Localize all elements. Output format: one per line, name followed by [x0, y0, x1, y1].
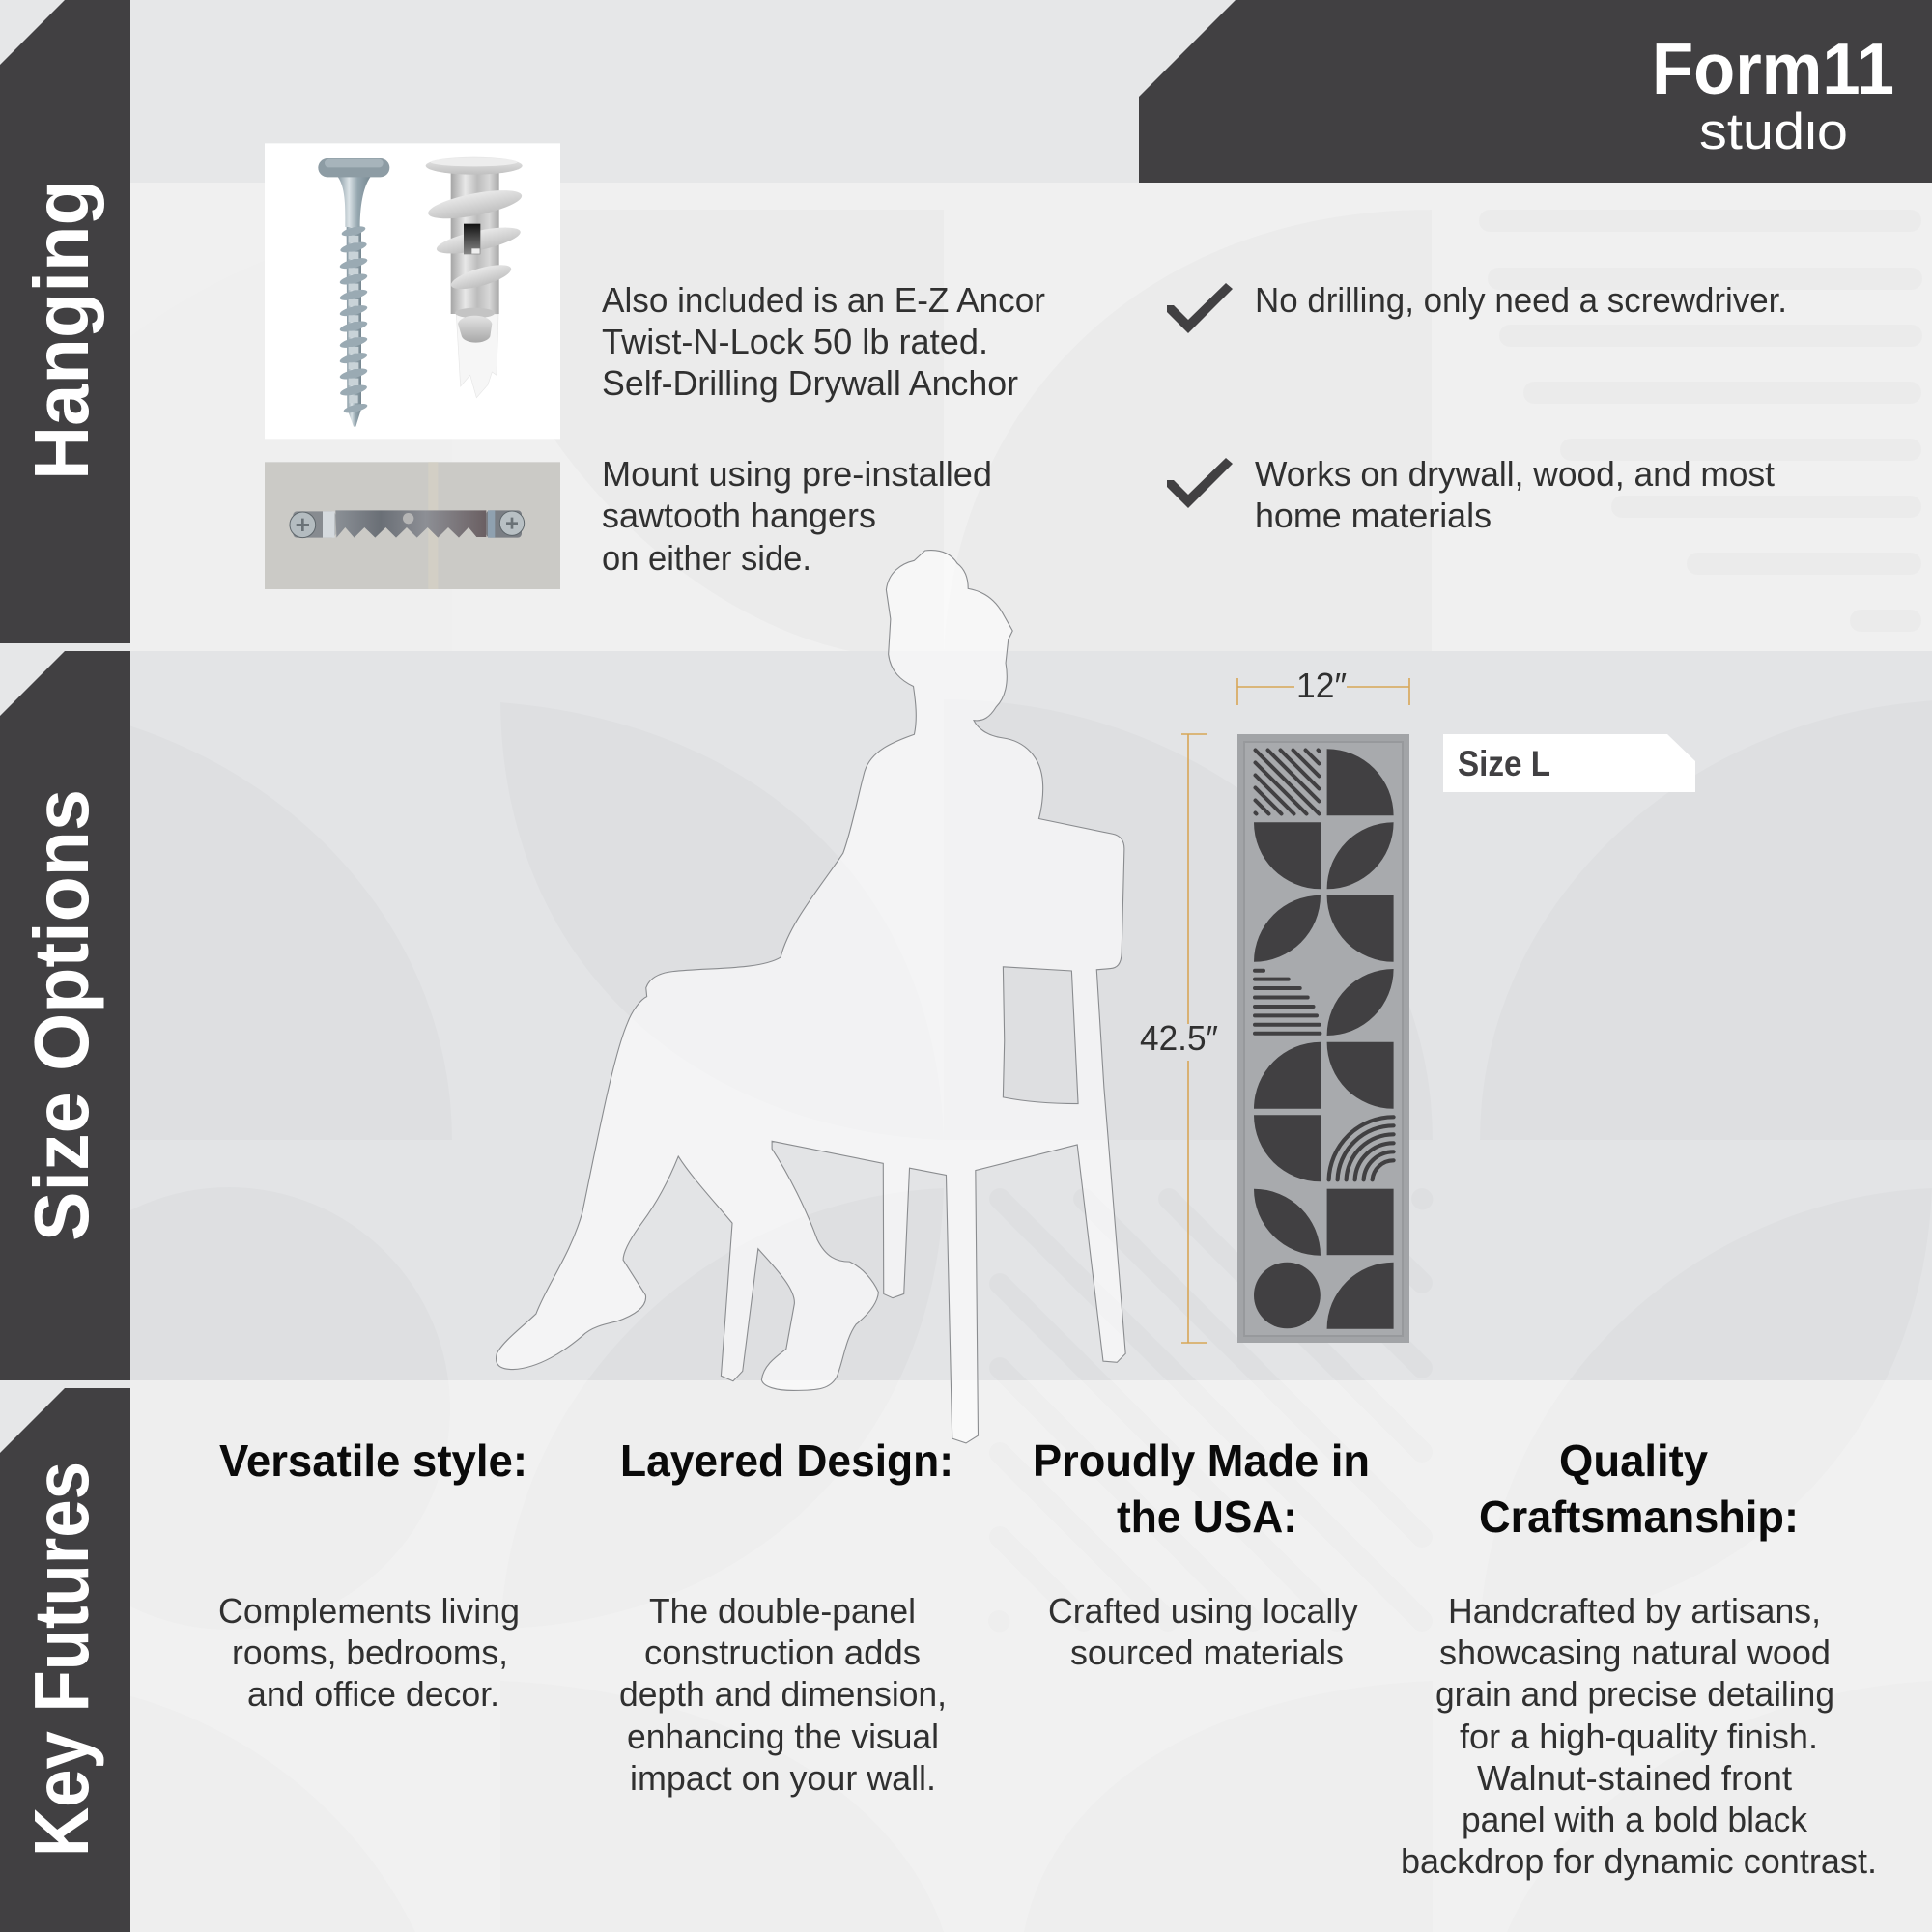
icon: check mark 2	[1167, 458, 1233, 508]
column: Quality Craftsmanship: Craftsmanship:	[1479, 1492, 1799, 1542]
artwork panel	[1237, 734, 1409, 1343]
column: Layered Design	[619, 1435, 953, 1798]
sidebar: Key Futures	[0, 1388, 130, 1932]
dimension: width 12 in	[1237, 666, 1409, 705]
dimension: height 42.5 in	[1140, 734, 1218, 1343]
column: Quality Craftsmanship: for a high-quality finish.	[1460, 1717, 1818, 1756]
logo: studio: studio	[1699, 103, 1848, 160]
column: Quality Craftsmanship	[1401, 1435, 1877, 1881]
column: Proudly Made in the USA	[1033, 1435, 1370, 1672]
tile: horizontal lines	[1255, 971, 1320, 1034]
column: Quality Craftsmanship: Quality	[1559, 1435, 1708, 1486]
column: Versatile style: Complements living	[218, 1591, 520, 1631]
text block: works on: home materials	[1255, 496, 1492, 535]
label: Size L	[1443, 734, 1695, 792]
column: Layered Design: depth and dimension,	[619, 1674, 947, 1714]
column: Layered Design: The double-panel	[649, 1591, 916, 1631]
column: Layered Design: Layered Design:	[620, 1435, 953, 1486]
column: Layered Design: impact on your wall.	[630, 1758, 936, 1798]
column: Proudly Made in the USA: Crafted using locally	[1048, 1591, 1358, 1631]
photo: sawtooth hanger	[265, 462, 560, 589]
dimension: width 12 in: 12″	[1296, 666, 1347, 705]
text block: works on: Works on drywall, wood, and most	[1255, 454, 1775, 494]
text block: hanger note: Mount using pre-installed	[602, 454, 992, 494]
column: Quality Craftsmanship: grain and precise detailing	[1435, 1674, 1834, 1714]
column: Quality Craftsmanship: panel with a bold black	[1462, 1800, 1808, 1839]
column: Proudly Made in the USA: Proudly Made in	[1033, 1435, 1370, 1486]
sidebar: Hanging: Hanging	[18, 180, 104, 480]
photo: screw and anchor	[265, 143, 560, 439]
text block: anchor note	[602, 280, 1045, 403]
column: Quality Craftsmanship: Walnut-stained front	[1477, 1758, 1792, 1798]
icon: check mark 1	[1167, 283, 1233, 333]
tile: concentric arches	[1329, 1117, 1394, 1179]
label: Size L: Size L	[1458, 744, 1550, 783]
text block: hanger note: on either side.	[602, 538, 811, 578]
dimension: height 42.5 in: 42.5″	[1140, 1018, 1218, 1058]
sidebar: Hanging	[0, 0, 130, 643]
column: Versatile style	[218, 1435, 527, 1714]
sidebar: Size Options: Size Options	[18, 789, 104, 1241]
column: Quality Craftsmanship: backdrop for dynamic contrast.	[1401, 1841, 1877, 1881]
column: Versatile style: rooms, bedrooms,	[232, 1633, 508, 1672]
sidebar: Key Futures: Key Futures	[18, 1462, 104, 1857]
icon: screw	[318, 158, 389, 427]
sidebar: Size Options	[0, 651, 130, 1380]
text block: hanger note: sawtooth hangers	[602, 496, 876, 535]
column: Versatile style: Versatile style:	[219, 1435, 527, 1486]
text block: anchor note: Twist-N-Lock 50 lb rated.	[602, 322, 988, 361]
tile: diagonal lines	[1256, 750, 1320, 813]
icon: drywall anchor	[426, 157, 524, 398]
column: Quality Craftsmanship: Handcrafted by artisans,	[1448, 1591, 1821, 1631]
silhouette: seated woman on chair	[497, 551, 1125, 1443]
column: Proudly Made in the USA: sourced materials	[1070, 1633, 1344, 1672]
panel: logo block	[1139, 0, 1932, 183]
column: Layered Design: construction adds	[644, 1633, 921, 1672]
logo: Form11: Form11	[1652, 28, 1894, 109]
column: Proudly Made in the USA: the USA:	[1117, 1492, 1297, 1542]
text block: no drilling: No drilling, only need a screwdriver.	[1255, 280, 1787, 320]
text block: anchor note: Also included is an E-Z Ancor	[602, 280, 1045, 320]
column: Quality Craftsmanship: showcasing natural wood	[1439, 1633, 1831, 1672]
text block: hanger note	[602, 454, 992, 578]
text block: works on	[1255, 454, 1775, 535]
column: Layered Design: enhancing the visual	[627, 1717, 939, 1756]
text block: anchor note: Self-Drilling Drywall Anchor	[602, 363, 1018, 403]
column: Versatile style: and office decor.	[247, 1674, 499, 1714]
